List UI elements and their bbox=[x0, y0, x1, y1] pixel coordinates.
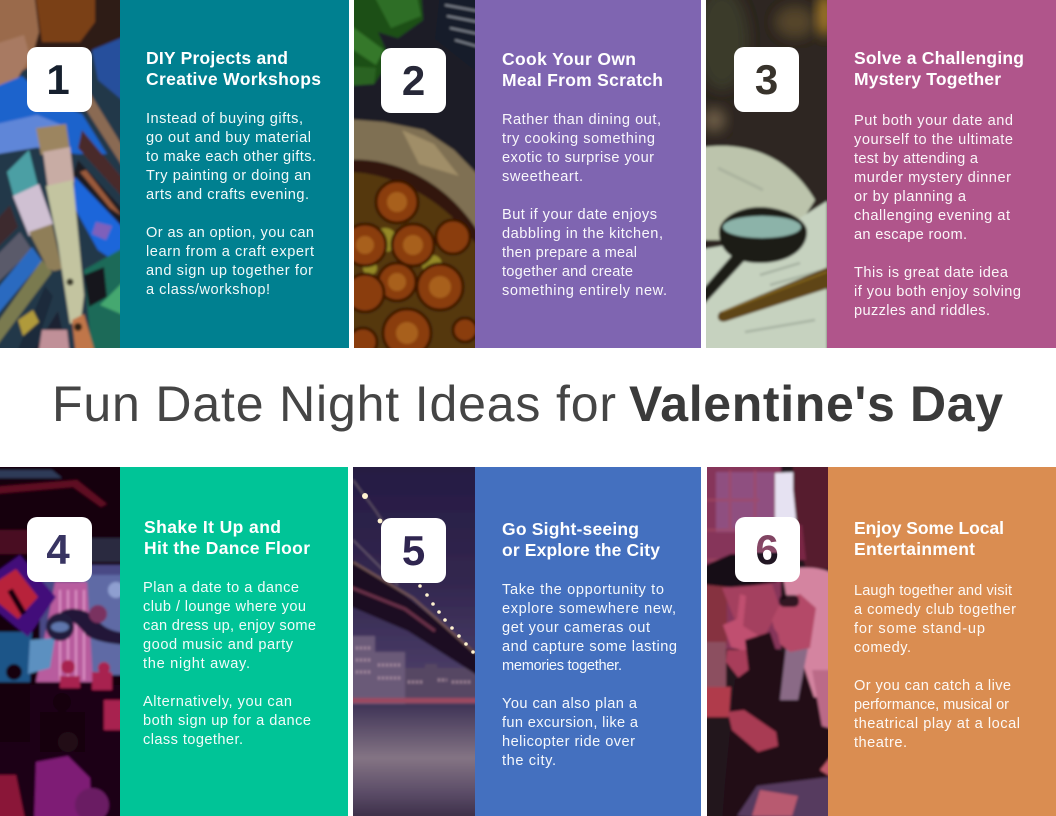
panel 3: mystery bbox=[696, 0, 1056, 356]
body text: explore somewhere new, bbox=[502, 601, 676, 617]
heading: Solve a Challenging bbox=[854, 48, 1024, 68]
body text: Try painting or doing an bbox=[146, 168, 311, 184]
body text: performance, musical or bbox=[854, 697, 1009, 713]
heading: Cook Your Own bbox=[502, 49, 636, 69]
heading bbox=[144, 517, 310, 558]
body text: helicopter ride over bbox=[502, 734, 635, 750]
body text: theatre. bbox=[854, 735, 907, 751]
number badge 1: 1 bbox=[46, 56, 70, 103]
number badge 6: 6 bbox=[755, 526, 779, 573]
panel background: magenta bbox=[827, 0, 1056, 348]
body text: dabbling in the kitchen, bbox=[502, 226, 663, 242]
body text: You can also plan a bbox=[502, 696, 638, 712]
body text: together and create bbox=[502, 264, 633, 280]
body text: Or you can catch a live bbox=[854, 678, 1011, 694]
number badge 1 bbox=[27, 47, 92, 112]
body text: sweetheart. bbox=[502, 169, 583, 185]
photo: couple at comedy club bbox=[707, 467, 828, 816]
body text: yourself to the ultimate bbox=[854, 132, 1013, 148]
heading: Creative Workshops bbox=[146, 69, 321, 89]
body text: puzzles and riddles. bbox=[854, 303, 990, 319]
heading bbox=[854, 518, 1004, 559]
body text: a comedy club together bbox=[854, 602, 1016, 618]
body text: for some stand-up bbox=[854, 621, 985, 637]
body text: Put both your date and bbox=[854, 113, 1013, 129]
body text bbox=[146, 111, 316, 298]
body text: Rather than dining out, bbox=[502, 112, 661, 128]
heading: or Explore the City bbox=[502, 540, 660, 560]
heading: Go Sight-seeing bbox=[502, 519, 639, 539]
heading: DIY Projects and bbox=[146, 48, 288, 68]
panel background: orange bbox=[828, 467, 1056, 816]
brick wall bbox=[699, 459, 781, 649]
title: Fun Date Night Ideas for bbox=[52, 376, 616, 432]
woman: hair and face bbox=[782, 565, 828, 700]
body text bbox=[143, 580, 316, 748]
icon: magnifier bbox=[706, 254, 745, 304]
photo: bridge at night bbox=[353, 467, 475, 816]
body text: Plan a date to a dance bbox=[143, 580, 299, 596]
brush handles, lower left bbox=[0, 206, 18, 246]
body text bbox=[854, 113, 1021, 319]
number badge 5 bbox=[381, 518, 446, 583]
dark red right side bbox=[791, 467, 828, 570]
man: cap, face, hand bbox=[699, 554, 777, 588]
title: Valentine's Day bbox=[629, 376, 1003, 432]
body text: good music and party bbox=[143, 637, 294, 653]
number badge 4 bbox=[27, 517, 92, 582]
crowd bbox=[0, 685, 128, 816]
heading bbox=[502, 49, 663, 90]
paint brush handles, right bbox=[85, 93, 120, 166]
body text: Laugh together and visit bbox=[854, 583, 1012, 599]
panel background: teal bbox=[120, 0, 349, 348]
body text: comedy. bbox=[854, 640, 911, 656]
body text: then prepare a meal bbox=[502, 245, 637, 261]
body text: Take the opportunity to bbox=[502, 582, 664, 598]
body text: test by attending a bbox=[854, 151, 979, 167]
heading: Entertainment bbox=[854, 539, 975, 559]
body text: Instead of buying gifts, bbox=[146, 111, 303, 127]
body text: a class/workshop! bbox=[146, 282, 270, 298]
bridge bbox=[353, 560, 475, 675]
body text bbox=[502, 582, 677, 769]
panel 1: DIY projects bbox=[0, 0, 349, 356]
number badge 3: 3 bbox=[755, 56, 778, 103]
heading: Shake It Up and bbox=[144, 517, 281, 537]
body text: theatrical play at a local bbox=[854, 716, 1020, 732]
body text: the city. bbox=[502, 753, 556, 769]
body text: Or as an option, you can bbox=[146, 225, 314, 241]
panel 6: local entertainment bbox=[699, 459, 1056, 816]
heading bbox=[502, 519, 660, 560]
title bbox=[52, 376, 1003, 432]
body text: But if your date enjoys bbox=[502, 207, 657, 223]
body text: class together. bbox=[143, 732, 243, 748]
number badge 5: 5 bbox=[402, 527, 425, 574]
body text: to make each other gifts. bbox=[146, 149, 316, 165]
body text: This is great date idea bbox=[854, 265, 1009, 281]
body text: both sign up for a dance bbox=[143, 713, 311, 729]
icon: pen bbox=[718, 264, 835, 322]
number badge 6 bbox=[735, 517, 800, 582]
body text: memories together. bbox=[502, 658, 622, 674]
body text: can dress up, enjoy some bbox=[143, 618, 316, 634]
city skyline bbox=[345, 636, 405, 704]
body text: arts and crafts evening. bbox=[146, 187, 309, 203]
jeans bbox=[737, 776, 836, 816]
body text: go out and buy material bbox=[146, 130, 311, 146]
black clothing bbox=[722, 650, 836, 816]
panel background: purple bbox=[475, 0, 701, 348]
heading: Mystery Together bbox=[854, 69, 1001, 89]
number badge 2: 2 bbox=[402, 57, 425, 104]
left lower brick and table bbox=[707, 583, 728, 644]
icon: tilted speaker bbox=[0, 555, 56, 637]
heading: Meal From Scratch bbox=[502, 70, 663, 90]
body text: try cooking something bbox=[502, 131, 655, 147]
body text: or by planning a bbox=[854, 189, 967, 205]
number badge 2 bbox=[381, 48, 446, 113]
heading: Hit the Dance Floor bbox=[144, 538, 310, 558]
number badge 3 bbox=[734, 47, 799, 112]
body text bbox=[502, 112, 667, 299]
photo: night club bbox=[0, 459, 128, 816]
parchment bbox=[354, 118, 475, 230]
body text: murder mystery dinner bbox=[854, 170, 1011, 186]
panel 2: cook a meal bbox=[344, 0, 701, 357]
body text: Alternatively, you can bbox=[143, 694, 292, 710]
body text: and sign up together for bbox=[146, 263, 313, 279]
body text bbox=[854, 583, 1020, 751]
icon: right brush bbox=[36, 124, 70, 155]
body text: fun excursion, like a bbox=[502, 715, 639, 731]
body text: exotic to surprise your bbox=[502, 150, 654, 166]
panel 4: dance floor bbox=[0, 459, 348, 816]
panel background: blue bbox=[475, 467, 701, 816]
body text: club / lounge where you bbox=[143, 599, 306, 615]
tart bbox=[354, 158, 475, 348]
heading bbox=[146, 48, 321, 89]
body text: the night away. bbox=[143, 656, 250, 672]
panel 5: sight-seeing bbox=[345, 459, 701, 816]
body text: something entirely new. bbox=[502, 283, 667, 299]
body text: an escape room. bbox=[854, 227, 967, 243]
icon: stage light bbox=[56, 609, 128, 645]
white window bbox=[775, 472, 802, 525]
icon: left brush bbox=[7, 150, 38, 198]
body text: challenging evening at bbox=[854, 208, 1010, 224]
body text: if you both enjoy solving bbox=[854, 284, 1021, 300]
forearm and hand bbox=[728, 710, 778, 752]
number badge 4: 4 bbox=[46, 526, 70, 573]
heading bbox=[854, 48, 1024, 89]
body text: get your cameras out bbox=[502, 620, 650, 636]
photo: magnifying glass on book bbox=[706, 0, 827, 348]
body text: and capture some lasting bbox=[502, 639, 677, 655]
lower right bbox=[83, 248, 120, 348]
panel background: green bbox=[120, 467, 348, 816]
photo: tomato tart bbox=[354, 0, 475, 348]
heading: Enjoy Some Local bbox=[854, 518, 1004, 538]
body text: learn from a craft expert bbox=[146, 244, 314, 260]
photo: paint brushes bbox=[0, 0, 128, 356]
